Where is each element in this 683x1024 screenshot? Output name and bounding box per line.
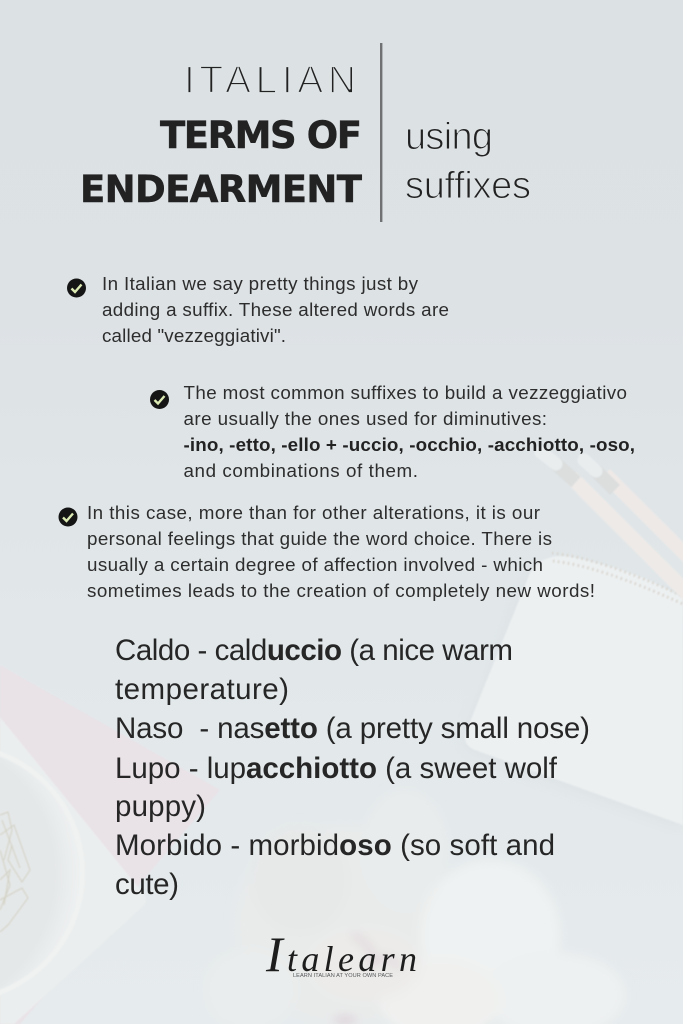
text block 2: The most common suffixes to build a vezzeggiativo bbox=[184, 382, 627, 403]
text block 2: and combinations of them. bbox=[184, 460, 418, 481]
text block 3: In this case, more than for other alterations, it is our bbox=[87, 502, 540, 523]
photo: white bowl bbox=[0, 743, 85, 1003]
example: morbido: Morbido - morbidoso (so soft and bbox=[115, 829, 555, 862]
subtitle bbox=[405, 116, 531, 207]
text block 3: sometimes leads to the creation of completely new words! bbox=[87, 580, 595, 601]
photo: white wallet with zipper bbox=[462, 553, 683, 828]
title line: ENDEARMENT: ENDEARMENT bbox=[80, 168, 363, 211]
photo: paper clips bbox=[0, 812, 30, 932]
example: caldo: temperature) bbox=[115, 673, 289, 706]
icon: check mark 2 bbox=[150, 390, 169, 409]
bullet 2 bbox=[150, 382, 635, 481]
icon: check mark 1 bbox=[67, 278, 86, 298]
title: left block bbox=[80, 59, 363, 211]
text block 1: called "vezzeggiativi". bbox=[102, 325, 286, 346]
example: naso: Naso - nasetto (a pretty small nose) bbox=[115, 712, 590, 745]
logo wordmark: Italearn bbox=[265, 926, 417, 982]
example: caldo bbox=[115, 634, 513, 706]
logo tagline: LEARN ITALIAN AT YOUR OWN PACE bbox=[293, 973, 393, 979]
example: caldo: Caldo - calduccio (a nice warm bbox=[115, 634, 513, 667]
text block 1: adding a suffix. These altered words are bbox=[102, 299, 449, 320]
title line: TERMS OF: TERMS OF bbox=[160, 114, 362, 157]
title divider bbox=[380, 43, 382, 222]
example: lupo: puppy) bbox=[115, 790, 206, 823]
example: morbido bbox=[115, 829, 555, 901]
bullet 3 bbox=[58, 502, 595, 601]
photo: pink paper sheet bbox=[0, 665, 220, 1024]
subtitle line: suffixes: suffixes bbox=[405, 165, 531, 207]
icon: check mark 3 bbox=[58, 508, 78, 526]
example: morbido: cute) bbox=[115, 868, 179, 901]
example: lupo: Lupo - lupacchiotto (a sweet wolf bbox=[115, 752, 558, 785]
examples list bbox=[115, 634, 590, 901]
text block 3: personal feelings that guide the word choice. There is bbox=[87, 528, 552, 549]
photo: peony flower bbox=[205, 790, 625, 1024]
text block 2 bbox=[184, 382, 635, 481]
text block 3: usually a certain degree of affection involved - which bbox=[87, 554, 543, 575]
title line: ITALIAN: ITALIAN bbox=[184, 59, 356, 102]
text block 1: In Italian we say pretty things just by bbox=[102, 273, 419, 294]
text block 1 bbox=[102, 273, 449, 346]
bullet 1 bbox=[67, 273, 449, 346]
text block 2: are usually the ones used for diminutives: bbox=[184, 408, 547, 429]
photo: marble tray bbox=[0, 717, 146, 1024]
subtitle line: using: using bbox=[405, 116, 493, 158]
logo: Italearn bbox=[265, 926, 417, 982]
example: lupo bbox=[115, 752, 558, 823]
text block 3 bbox=[87, 502, 595, 601]
photo: pencils bbox=[541, 452, 683, 596]
text block 2: -ino, -etto, -ello + -uccio, -occhio, -acchiotto, -oso, bbox=[184, 434, 635, 455]
